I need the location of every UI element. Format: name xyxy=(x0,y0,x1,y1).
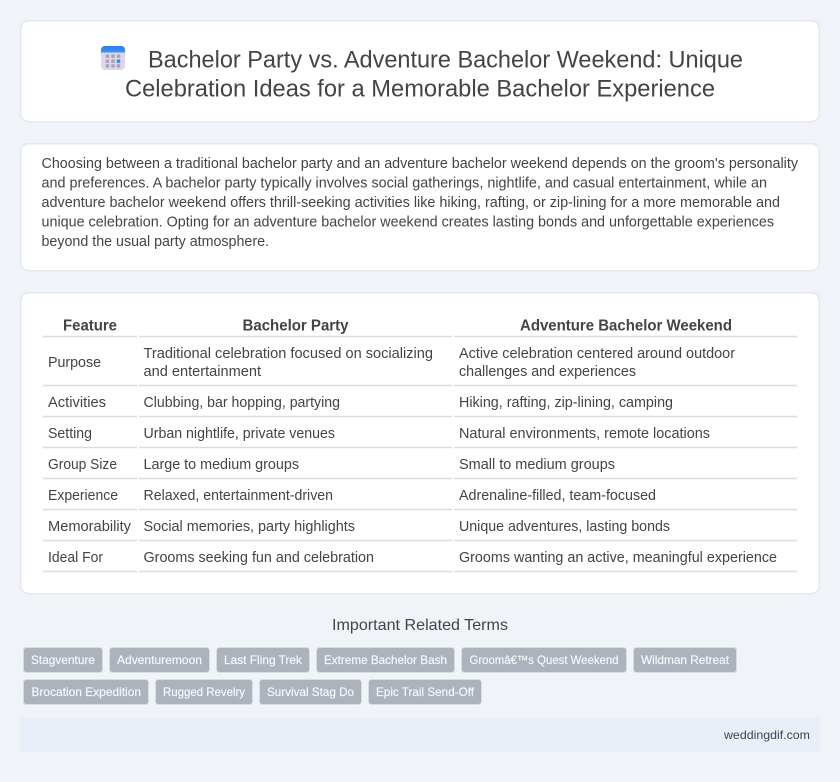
icon: calendar xyxy=(101,46,125,70)
row: purpose xyxy=(48,346,735,380)
related term tags xyxy=(24,648,736,704)
panel: introduction text: Choosing between a traditional bachelor party and an adventure bachelor weekend depends on the groom's personality xyxy=(42,156,799,172)
tag: Survival Stag Do: Survival Stag Do xyxy=(267,685,354,699)
row: group size: Small to medium groups xyxy=(459,457,615,473)
row: setting: Urban nightlife, private venues xyxy=(144,426,335,442)
heading: important related terms: Important Related Terms xyxy=(332,617,508,634)
table header row: Bachelor Party xyxy=(242,318,349,334)
tag: Epic Trail Send-Off: Epic Trail Send-Off xyxy=(376,685,475,699)
tag: Stagventure xyxy=(24,648,102,672)
row: setting: Setting xyxy=(48,426,92,442)
tag: Survival Stag Do xyxy=(260,680,362,704)
row: purpose: challenges and experiences xyxy=(459,364,636,380)
row: memorability: Unique adventures, lasting bonds xyxy=(459,519,670,535)
panel: introduction text: beyond the usual party atmosphere. xyxy=(42,234,269,250)
tag: Last Fling Trek xyxy=(216,648,310,672)
tag: Groom's Quest Weekend xyxy=(462,648,626,672)
title: Bachelor Party vs. Adventure Bachelor Weekend: Unique xyxy=(148,46,743,74)
row: activities: Hiking, rafting, zip-lining, camping xyxy=(459,395,673,411)
panel: introduction text: and preferences. A bachelor party typically involves social gatherings, nightlife, and casual entertainment, while an xyxy=(42,176,767,192)
title xyxy=(125,46,743,102)
tag: Stagventure: Stagventure xyxy=(31,653,95,667)
tag: Epic Trail Send-Off xyxy=(368,680,482,704)
tag: Rugged Revelry: Rugged Revelry xyxy=(163,685,245,699)
row: activities: Activities xyxy=(48,395,106,411)
row: purpose: Traditional celebration focused on socializing xyxy=(144,346,433,362)
tag: Extreme Bachelor Bash xyxy=(316,648,454,672)
row: memorability: Memorability xyxy=(48,519,132,535)
table header row: Feature xyxy=(63,318,117,334)
tag: Groom's Quest Weekend: Groomâ€™s Quest Weekend xyxy=(470,653,618,667)
row: ideal for xyxy=(48,550,777,566)
row: activities: Clubbing, bar hopping, partying xyxy=(144,395,340,411)
panel: title header xyxy=(21,21,819,122)
row: purpose: Purpose xyxy=(48,355,101,371)
tag: Wildman Retreat xyxy=(634,648,736,672)
footer xyxy=(20,718,820,752)
panel: introduction text: unique celebration. Opting for an adventure bachelor weekend creates lasting bonds and unforgettable experiences xyxy=(42,214,774,230)
tag: Extreme Bachelor Bash: Extreme Bachelor Bash xyxy=(324,653,447,667)
row: experience: Experience xyxy=(48,488,118,504)
row: experience: Relaxed, entertainment-driven xyxy=(144,488,333,504)
row: activities xyxy=(48,395,673,411)
tag: Rugged Revelry xyxy=(156,680,252,704)
row: ideal for: Ideal For xyxy=(48,550,103,566)
row: memorability: Social memories, party highlights xyxy=(144,519,355,535)
row: experience: Adrenaline-filled, team-focused xyxy=(459,488,656,504)
row: purpose: and entertainment xyxy=(144,364,261,380)
row: experience xyxy=(48,488,656,504)
tag: Adventuremoon: Adventuremoon xyxy=(117,653,202,667)
row: group size: Group Size xyxy=(48,457,117,473)
tag: Brocation Expedition: Brocation Expedition xyxy=(32,685,141,699)
row: setting xyxy=(48,426,710,442)
title: Celebration Ideas for a Memorable Bachelor Experience xyxy=(125,76,715,102)
row: ideal for: Grooms seeking fun and celebration xyxy=(144,550,374,566)
footer: weddingdif.com xyxy=(723,728,810,742)
tag: Last Fling Trek: Last Fling Trek xyxy=(224,653,303,667)
row: memorability xyxy=(48,519,670,535)
tag: Adventuremoon xyxy=(110,648,210,672)
table header row: Adventure Bachelor Weekend xyxy=(520,318,732,334)
row: ideal for: Grooms wanting an active, meaningful experience xyxy=(459,550,777,566)
row: purpose: Active celebration centered around outdoor xyxy=(459,346,735,362)
tag: Brocation Expedition xyxy=(24,680,148,704)
panel: introduction text: adventure bachelor weekend offers thrill-seeking activities like hiking, rafting, or zip-lining for a more memorable and xyxy=(42,195,780,211)
table header row xyxy=(63,318,732,334)
panel: introduction text xyxy=(21,144,819,271)
row: group size xyxy=(48,457,615,473)
panel: comparison table xyxy=(21,293,819,594)
row: group size: Large to medium groups xyxy=(144,457,299,473)
row: setting: Natural environments, remote locations xyxy=(459,426,710,442)
tag: Wildman Retreat: Wildman Retreat xyxy=(641,653,730,667)
